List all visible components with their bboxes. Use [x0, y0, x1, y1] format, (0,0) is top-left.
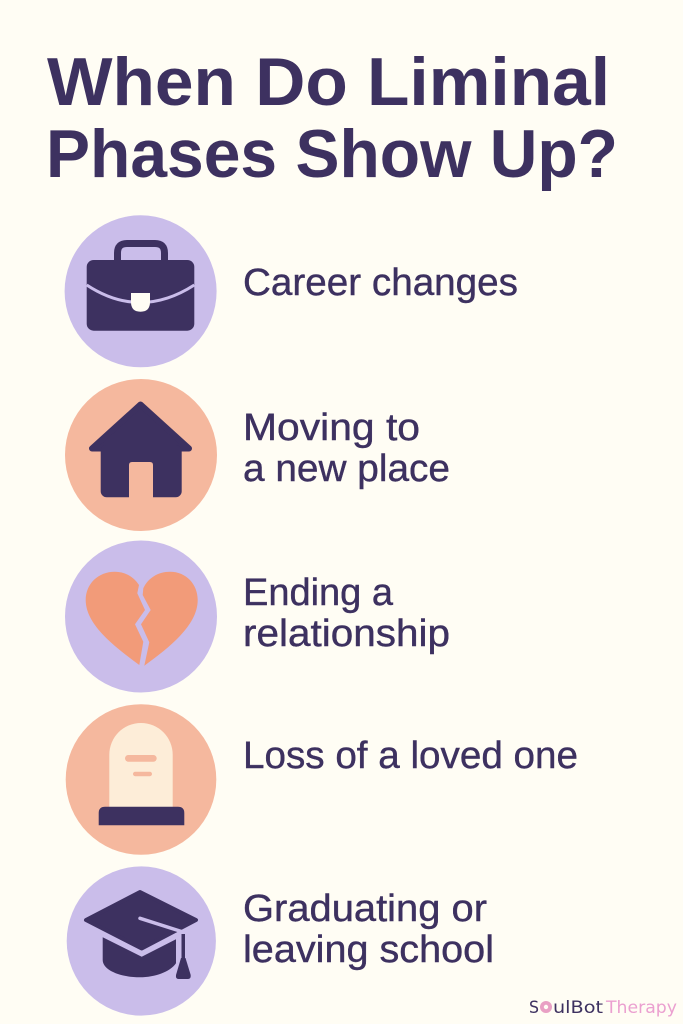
logo: SoulBot Therapy: Therapy [605, 998, 677, 1018]
label: ending a relationship: Ending a [243, 572, 394, 614]
label: graduating or leaving school: Graduating or [243, 888, 487, 930]
label: career changes: Career changes [243, 262, 518, 304]
label: moving to a new place: a new place [243, 448, 450, 490]
title [46, 44, 618, 192]
title: Phases Show Up? [46, 116, 618, 192]
icon: graduation cap [67, 866, 216, 1016]
logo: SoulBot Therapy [529, 998, 677, 1018]
label: moving to a new place: Moving to [243, 407, 420, 449]
label: graduating or leaving school [243, 888, 494, 971]
logo: SoulBot Therapy: S [529, 998, 539, 1018]
icon: gravestone [66, 704, 216, 855]
icon: house [65, 379, 217, 531]
icon: briefcase [65, 215, 217, 367]
label: ending a relationship [243, 572, 450, 655]
logo: SoulBot Therapy: ulBot [553, 998, 603, 1018]
label: loss of a loved one: Loss of a loved one [243, 735, 578, 777]
label: moving to a new place [243, 407, 450, 490]
label: ending a relationship: relationship [243, 613, 450, 655]
title: When Do Liminal [47, 44, 610, 120]
label: graduating or leaving school: leaving school [243, 929, 494, 971]
icon: broken heart [65, 540, 217, 692]
